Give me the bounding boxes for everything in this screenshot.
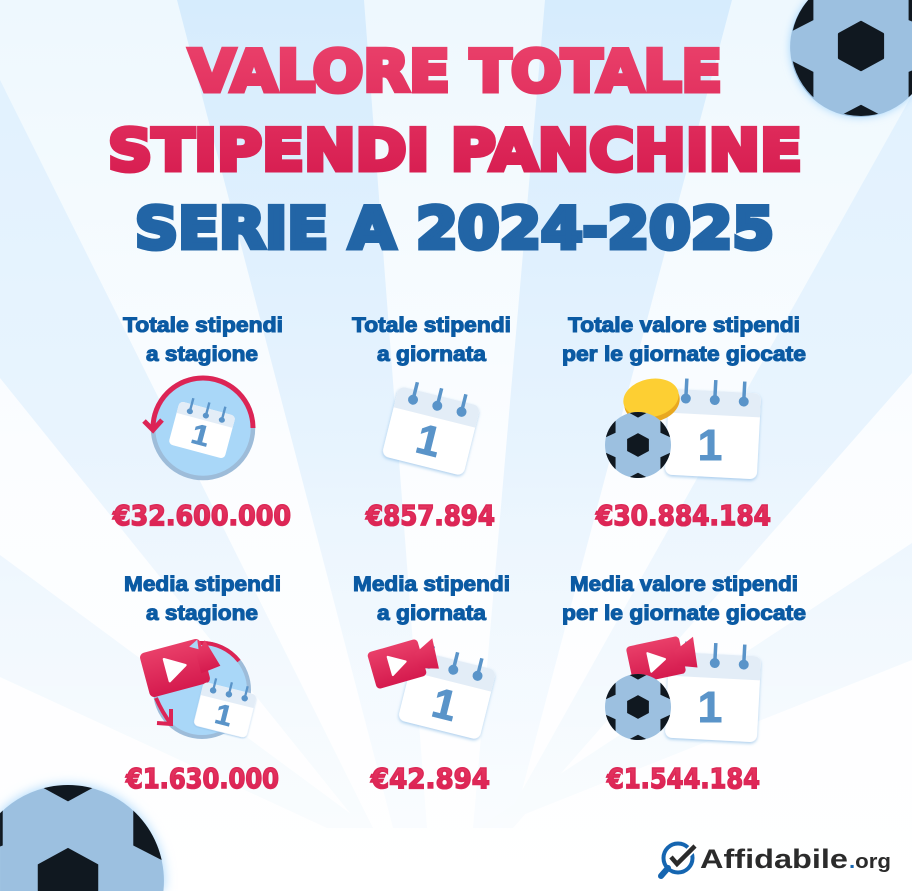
panel: media valore stipendi per le giornate giocate xyxy=(562,572,806,795)
panel: media stipendi a giornata xyxy=(353,572,510,795)
heading: a stagione xyxy=(146,601,258,625)
icon: camera, football and calendar: 1 xyxy=(698,683,722,732)
heading: Media stipendi xyxy=(124,572,281,596)
value: €30.884.184 xyxy=(595,500,771,532)
heading xyxy=(124,572,281,625)
icon: calendar: 1 xyxy=(412,415,446,466)
heading: a giornata xyxy=(377,342,487,366)
wordmark suffix: .org xyxy=(849,851,891,873)
value: €1.630.000 xyxy=(125,763,279,795)
panel: media stipendi a stagione xyxy=(124,572,281,795)
heading: a giornata xyxy=(377,601,487,625)
value: €1.544.184 xyxy=(606,763,760,795)
title: VALORE TOTALE xyxy=(189,39,722,105)
icon: calendar xyxy=(382,378,482,476)
title: STIPENDI PANCHINE xyxy=(108,118,802,184)
heading: Totale valore stipendi xyxy=(568,313,800,337)
value: €857.894 xyxy=(365,500,495,532)
decorative football bottom left xyxy=(0,777,169,891)
heading: Media stipendi xyxy=(353,572,510,596)
icon: camera and calendar xyxy=(367,634,498,740)
heading xyxy=(353,572,510,625)
decorative football top right xyxy=(788,0,912,122)
heading: a stagione xyxy=(146,342,258,366)
value: €32.600.000 xyxy=(112,500,291,532)
heading xyxy=(123,313,283,366)
heading xyxy=(352,313,511,366)
icon: camera, circle and calendar xyxy=(139,634,258,738)
heading: Totale stipendi xyxy=(352,313,511,337)
value: €42.894 xyxy=(370,763,490,795)
heading: per le giornate giocate xyxy=(562,601,806,625)
heading: Media valore stipendi xyxy=(570,572,798,596)
icon: magnifier with check xyxy=(661,844,695,876)
icon: coin, football and calendar: 1 xyxy=(698,421,722,470)
icon: coin, football and calendar xyxy=(602,374,762,481)
icon: camera, circle and calendar: 1 xyxy=(212,699,235,733)
panel: totale valore stipendi per le giornate giocate xyxy=(562,313,806,532)
heading: per le giornate giocate xyxy=(562,342,806,366)
wordmark: Affidabile xyxy=(700,844,848,874)
icon: calendar in circular arrow: 1 xyxy=(188,418,213,453)
heading: Totale stipendi xyxy=(123,313,283,337)
icon: camera, football and calendar xyxy=(602,633,762,743)
panel: totale stipendi a stagione xyxy=(112,313,291,532)
title xyxy=(108,39,802,262)
logo: Affidabile.org xyxy=(661,844,891,876)
icon: camera and calendar: 1 xyxy=(428,679,462,730)
heading xyxy=(562,572,806,625)
panel: totale stipendi a giornata xyxy=(352,313,511,532)
title: SERIE A 2024-2025 xyxy=(135,196,774,262)
heading xyxy=(562,313,806,366)
icon: calendar in circular arrow xyxy=(144,378,253,478)
